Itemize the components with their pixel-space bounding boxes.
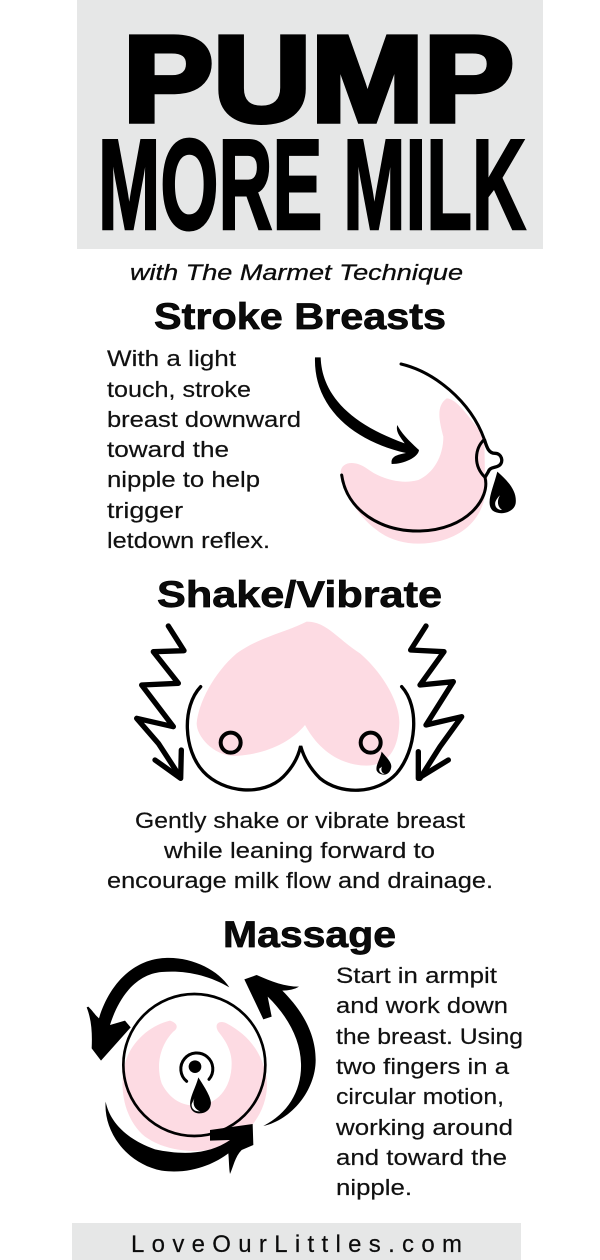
panel: stroke breasts: [107, 296, 516, 553]
heading: shake vibrate: Shake/Vibrate: [157, 574, 442, 615]
text block: shake instructions: while leaning forward to: [163, 838, 435, 863]
panel: shake vibrate: [107, 574, 493, 893]
text block: massage instructions: Start in armpit: [336, 963, 498, 988]
heading: stroke breasts: Stroke Breasts: [154, 296, 446, 337]
title banner: [77, 0, 543, 257]
text block: shake instructions: [107, 808, 493, 893]
text block: massage instructions: two fingers in a: [336, 1054, 510, 1079]
text block: stroke instructions: breast downward: [107, 407, 301, 432]
heading: massage: Massage: [223, 914, 396, 955]
text block: massage instructions: and toward the: [336, 1145, 507, 1170]
text block: stroke instructions: toward the: [107, 437, 229, 462]
panel: massage: [87, 914, 523, 1200]
footer bar: LoveOurLittles.com: [131, 1231, 462, 1258]
text block: massage instructions: circular motion,: [336, 1084, 504, 1109]
text block: stroke instructions: With a light: [107, 346, 237, 371]
text block: massage instructions: [335, 963, 523, 1200]
text block: shake instructions: encourage milk flow and drainage.: [107, 868, 493, 893]
text block: stroke instructions: [107, 346, 301, 553]
text block: shake instructions: Gently shake or vibrate breast: [135, 808, 466, 833]
text block: massage instructions: the breast. Using: [336, 1024, 523, 1049]
text block: massage instructions: working around: [335, 1115, 513, 1140]
text block: stroke instructions: touch, stroke: [107, 377, 251, 402]
subtitle: with The Marmet Technique: [130, 260, 463, 285]
text block: stroke instructions: letdown reflex.: [107, 528, 270, 553]
text block: stroke instructions: trigger: [107, 498, 184, 523]
icon: breast with circular arrows: [87, 958, 316, 1174]
text block: massage instructions: nipple.: [336, 1175, 412, 1200]
title banner: PUMP: [123, 11, 514, 147]
text block: stroke instructions: nipple to help: [107, 467, 260, 492]
text block: massage instructions: and work down: [336, 993, 508, 1018]
icon: side breast with arrow: [315, 357, 516, 544]
footer bar: [72, 1223, 521, 1260]
icon: two breasts with zigzag arrows: [137, 622, 462, 790]
